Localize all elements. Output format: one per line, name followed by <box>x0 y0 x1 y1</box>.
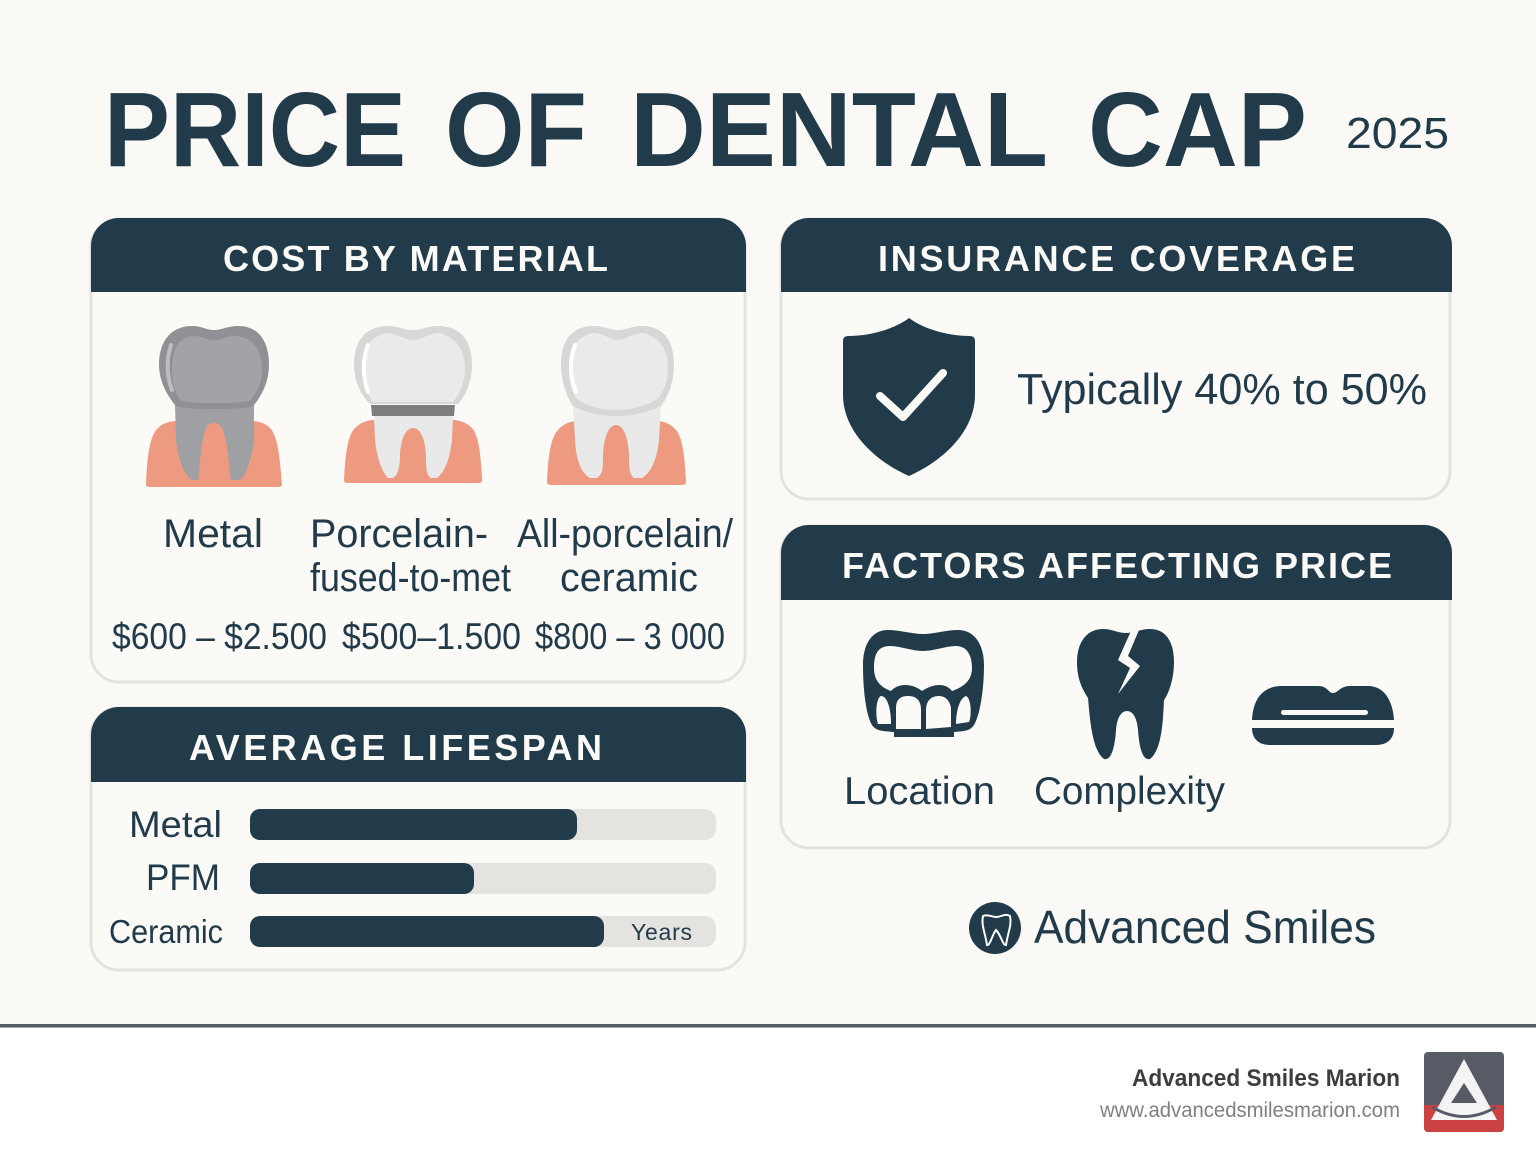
price: porcelain-fused-to-metal: $500–1.500 <box>342 616 521 657</box>
heading: insurance coverage: INSURANCE COVERAGE <box>878 238 1355 279</box>
footer credit: Advanced Smiles Marion <box>1132 1065 1400 1092</box>
title <box>104 71 1307 189</box>
bar row: pfm <box>146 857 716 898</box>
bar row: metal: Metal <box>129 804 222 845</box>
icon: all-porcelain crown tooth <box>547 326 686 485</box>
label: all-porcelain ceramic: All-porcelain/ <box>517 512 734 556</box>
panel: cost by material <box>91 218 746 682</box>
heading: average lifespan: AVERAGE LIFESPAN <box>189 727 602 768</box>
heading: cost by material: COST BY MATERIAL <box>223 238 608 279</box>
label: porcelain-fused-to-metal <box>310 512 511 600</box>
icon: porcelain-fused-to-metal crown tooth <box>344 326 482 483</box>
icon: third factor dental crown <box>1252 686 1394 745</box>
label: porcelain-fused-to-metal: Porcelain- <box>310 512 488 556</box>
bar row: ceramic: Ceramic <box>109 913 223 950</box>
price: metal: $600 – $2.500 <box>112 616 327 657</box>
panel: insurance coverage <box>781 218 1452 499</box>
panel: average lifespan <box>91 707 746 970</box>
bar row: ceramic <box>109 913 716 950</box>
label: all-porcelain ceramic <box>517 512 734 600</box>
brand logo: advanced smiles: Advanced Smiles <box>1034 901 1376 953</box>
icon: metal crown tooth <box>146 326 282 487</box>
title: OF <box>445 71 587 189</box>
label: complexity: Complexity <box>1034 770 1225 813</box>
footer logo <box>1424 1052 1504 1132</box>
footer credit <box>1099 1065 1400 1122</box>
title: CAP <box>1088 71 1307 189</box>
price: ceramic: $800 – 3 000 <box>535 616 725 657</box>
icon: complexity cracked tooth <box>1077 629 1174 759</box>
label: metal: Metal <box>163 512 263 556</box>
title: PRICE <box>104 71 406 189</box>
year: 2025 <box>1346 109 1449 158</box>
title: DENTAL <box>630 71 1048 189</box>
panel: factors affecting price <box>781 525 1452 848</box>
icon: shield with check <box>843 318 975 476</box>
coverage text: Typically 40% to 50% <box>1017 365 1427 414</box>
bar row: pfm: PFM <box>146 857 220 898</box>
bar row: metal <box>129 804 716 845</box>
heading: factors affecting price: FACTORS AFFECTING PRICE <box>842 545 1392 586</box>
label: porcelain-fused-to-metal: fused-to-met <box>310 556 511 600</box>
label: all-porcelain ceramic: ceramic <box>560 556 698 600</box>
bar row: ceramic: Years <box>631 919 692 945</box>
label: location: Location <box>844 770 995 813</box>
footer credit: www.advancedsmilesmarion.com <box>1099 1099 1400 1122</box>
icon: location teeth arch <box>863 630 984 737</box>
